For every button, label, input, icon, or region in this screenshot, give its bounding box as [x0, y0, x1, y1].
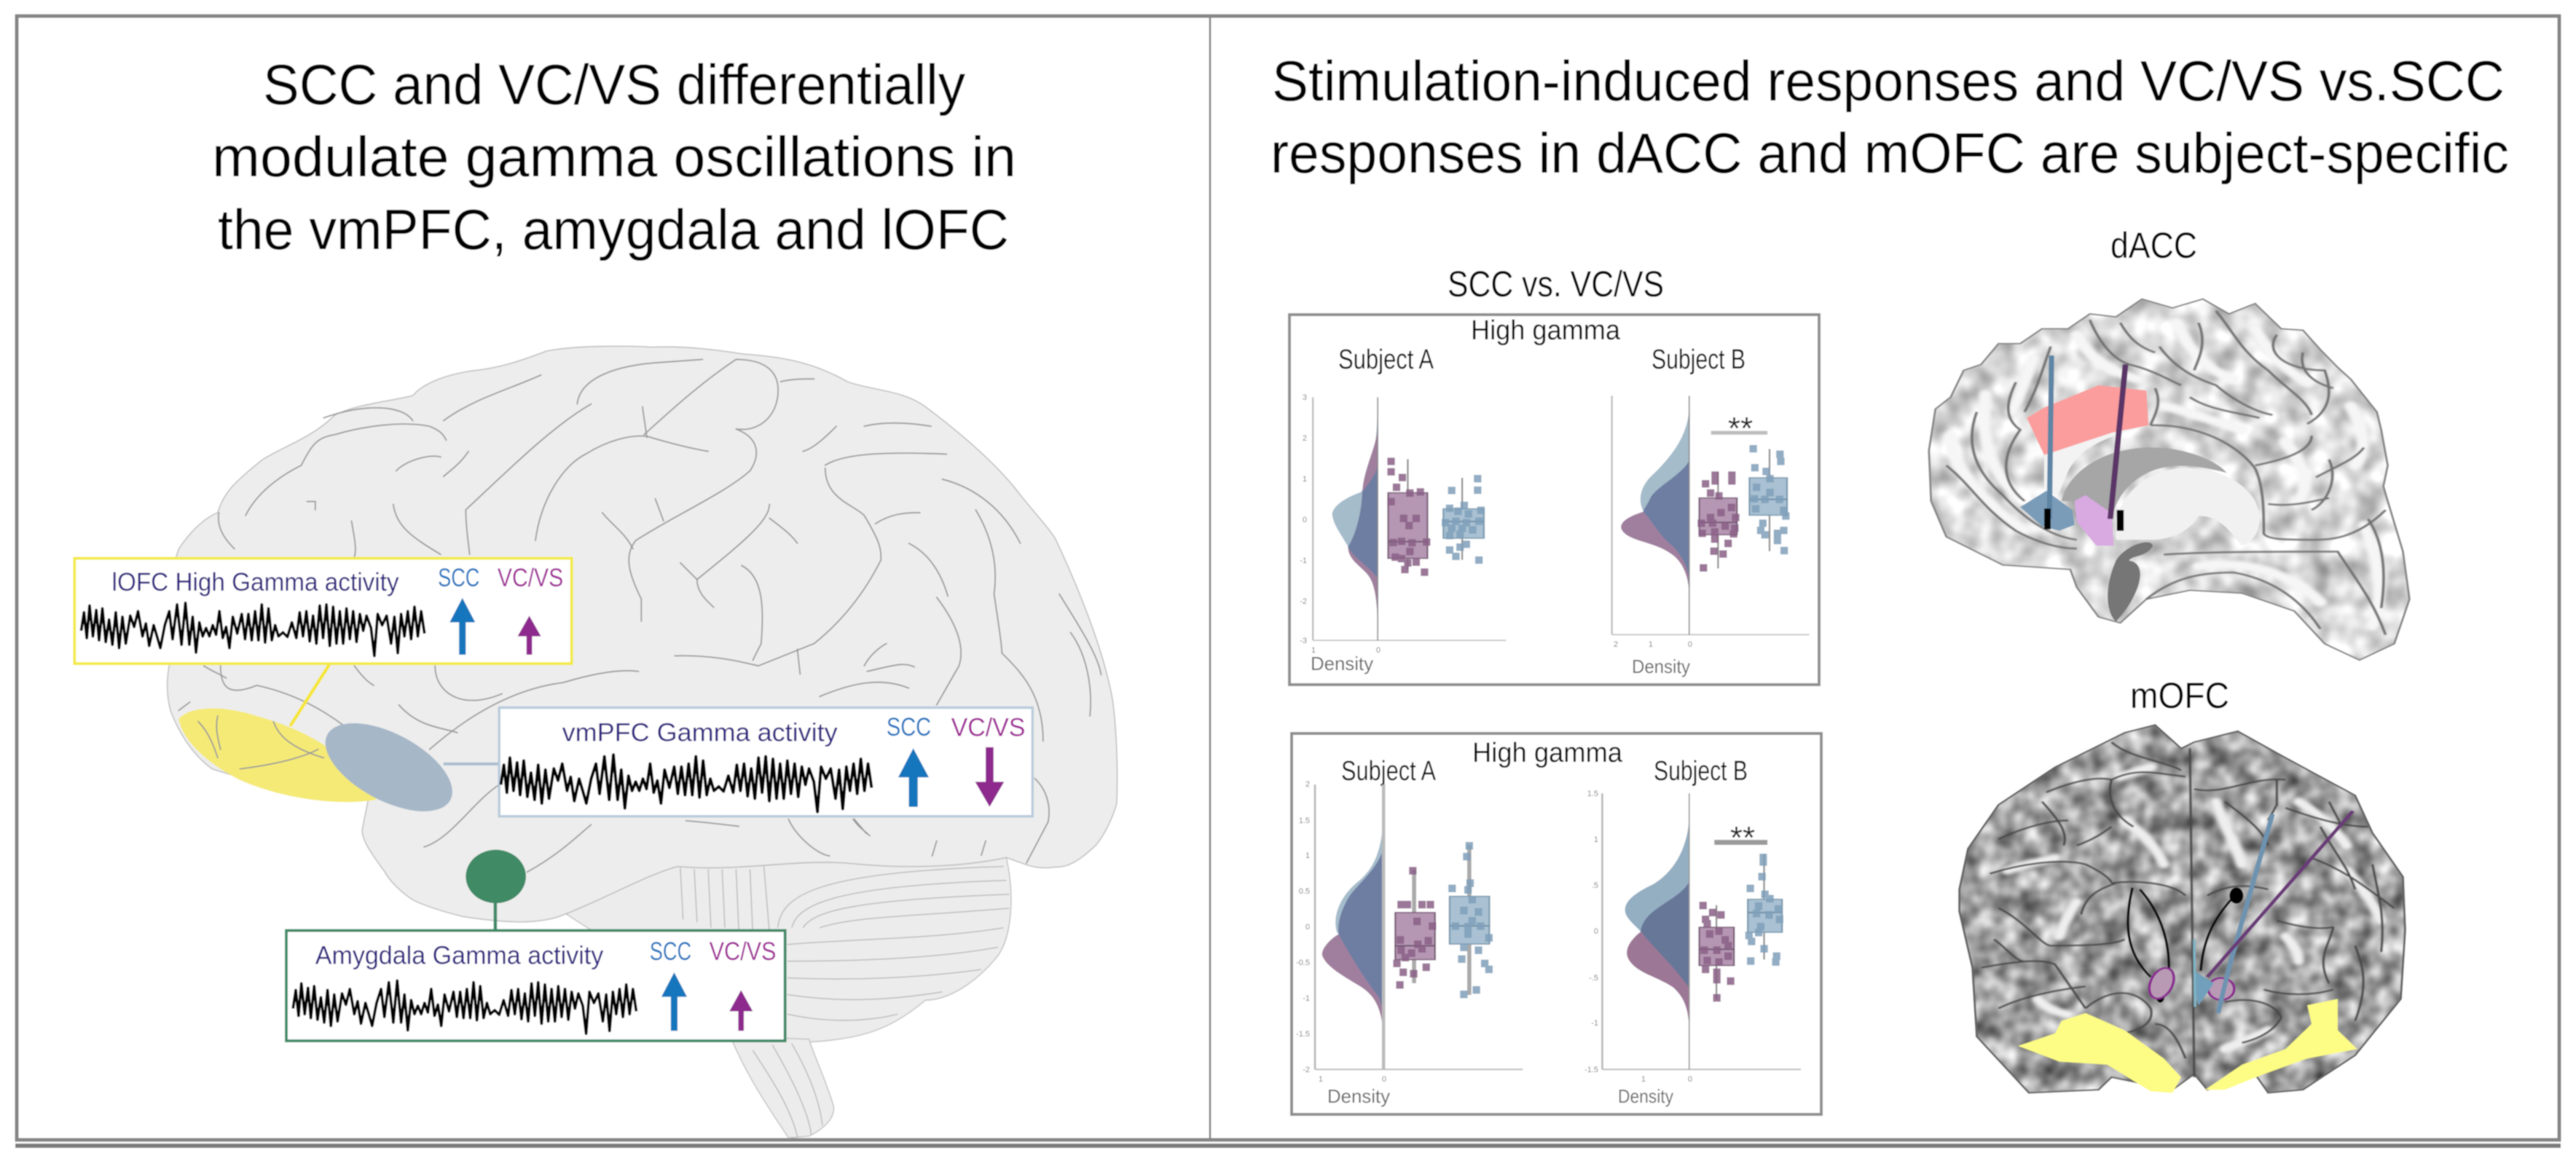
brain: mOFC frontal view — [1957, 723, 2407, 1094]
panel: raincloud plots top: Subject A — [1338, 345, 1434, 375]
corpus callosum — [2062, 447, 2227, 519]
callout: vmPFC Gamma activity: SCC — [887, 713, 931, 741]
panel: raincloud plots bottom: 1 — [1305, 851, 1310, 860]
vmPFC region — [312, 705, 466, 830]
panel: raincloud plots top: 0 — [1688, 640, 1692, 649]
panel: raincloud plots top: -3 — [1300, 637, 1307, 645]
panel: raincloud plots bottom: -1 — [1591, 1019, 1598, 1028]
panel: raincloud plots top: 2 — [1303, 434, 1307, 443]
panel: raincloud plots top: 1 — [1311, 646, 1316, 655]
panel: raincloud plots bottom: 0.5 — [1299, 887, 1310, 896]
chart: Subject B — [1602, 793, 1801, 1069]
SCC target — [2020, 491, 2075, 531]
callout: Amygdala Gamma activity: SCC — [650, 937, 691, 966]
VC/VS target — [2075, 495, 2113, 546]
panel: raincloud plots bottom: -1.5 — [1585, 1066, 1598, 1074]
panel: raincloud plots bottom: -1 — [1303, 994, 1310, 1003]
right panel title: responses in dACC and mOFC are subject-specific — [1271, 121, 2509, 185]
chart: Subject B — [1612, 395, 1810, 634]
panel: raincloud plots bottom: Subject B — [1654, 756, 1748, 787]
callout: vmPFC Gamma activity — [499, 708, 1032, 816]
panel: raincloud plots top: ** — [1728, 411, 1753, 446]
left panel title: SCC and VC/VS differentially — [263, 52, 965, 117]
chart: Subject A — [1313, 397, 1506, 640]
panel: raincloud plots top: 2 — [1614, 640, 1618, 649]
panel: raincloud plots bottom: 1.5 — [1299, 816, 1310, 825]
dACC region — [2027, 385, 2148, 455]
right panel title — [1271, 49, 2509, 185]
callout: Amygdala Gamma activity: VC/VS — [710, 937, 776, 966]
panel: raincloud plots bottom — [1292, 733, 1821, 1114]
panel: raincloud plots bottom: High gamma — [1472, 738, 1623, 768]
panel: raincloud plots bottom: 0 — [1382, 1075, 1386, 1084]
callout: vmPFC Gamma activity: vmPFC Gamma activity — [562, 718, 838, 747]
panel: raincloud plots top: 0 — [1376, 646, 1381, 655]
brainstem section — [2108, 542, 2153, 621]
panel: raincloud plots top: Density — [1311, 653, 1373, 674]
panel: raincloud plots top: -2 — [1300, 597, 1307, 606]
callout: Amygdala Gamma activity: Amygdala Gamma activity — [315, 941, 604, 969]
panel: raincloud plots bottom: -.5 — [1589, 974, 1598, 983]
cingulate white band — [2044, 425, 2148, 495]
chart: Subject A — [1315, 784, 1523, 1069]
panel: raincloud plots bottom: 0 — [1688, 1075, 1692, 1084]
panel: raincloud plots top: 1 — [1303, 475, 1307, 484]
panel: raincloud plots top: High gamma — [1471, 315, 1621, 346]
panel: raincloud plots top — [1289, 315, 1819, 685]
panel: raincloud plots bottom: Density — [1618, 1085, 1673, 1107]
heading: SCC vs. VC/VS: SCC vs. VC/VS — [1448, 264, 1664, 304]
panel: raincloud plots bottom: 1 — [1594, 835, 1598, 844]
thalamus — [2116, 468, 2259, 546]
gyri highlights — [1951, 323, 2379, 626]
gyri highlights — [2007, 767, 2381, 1049]
callout: Amygdala Gamma activity — [286, 931, 785, 1041]
panel: raincloud plots top: -1 — [1300, 556, 1307, 565]
panel: raincloud plots bottom: 1.5 — [1587, 790, 1598, 798]
lOFC region — [178, 709, 377, 802]
electrode: SCC — [2218, 814, 2272, 1013]
panel: raincloud plots bottom: 0 — [1305, 923, 1310, 932]
panel: lateral brain with callouts — [74, 346, 1118, 1138]
right panel title: Stimulation-induced responses and VC/VS vs.SCC — [1272, 49, 2505, 113]
panel: raincloud plots bottom: -0.5 — [1296, 959, 1310, 967]
electrode: VC/VS — [2110, 364, 2126, 531]
brain: dACC medial view — [1928, 297, 2411, 661]
callout: vmPFC Gamma activity: VC/VS — [951, 714, 1025, 742]
callout: lOFC High Gamma activity: lOFC High Gamma activity — [112, 568, 399, 597]
callout: lOFC High Gamma activity: VC/VS — [498, 564, 563, 592]
panel: raincloud plots top: Density — [1632, 656, 1690, 677]
lOFC region: left — [2018, 1013, 2181, 1093]
panel: raincloud plots top: Subject B — [1652, 345, 1746, 375]
heading: mOFC: mOFC — [2130, 675, 2229, 716]
panel: raincloud plots bottom: 2 — [1305, 780, 1310, 789]
panel: raincloud plots bottom: Density — [1327, 1085, 1390, 1107]
dark ventricles — [2128, 888, 2234, 983]
left panel title — [212, 52, 1016, 261]
panel: raincloud plots top: 1 — [1649, 640, 1653, 649]
panel: raincloud plots bottom: Subject A — [1341, 756, 1437, 787]
panel: raincloud plots bottom: 1 — [1641, 1075, 1646, 1084]
panel: raincloud plots bottom: -2 — [1303, 1066, 1310, 1074]
left panel title: modulate gamma oscillations in — [212, 125, 1016, 189]
panel: raincloud plots bottom: -1.5 — [1296, 1030, 1310, 1039]
connector: lOFC — [290, 665, 329, 726]
panel: raincloud plots bottom: 0 — [1594, 927, 1598, 936]
connector: amygdala — [493, 902, 498, 932]
SCC target — [2194, 971, 2214, 1005]
cerebellum folds — [680, 867, 1009, 1137]
panel: raincloud plots top: 3 — [1303, 393, 1307, 402]
lOFC region: right — [2205, 999, 2357, 1090]
left panel title: the vmPFC, amygdala and lOFC — [218, 197, 1009, 261]
brain illustration — [168, 346, 1118, 1138]
connector: vmPFC — [444, 762, 500, 766]
panel: raincloud plots bottom: ** — [1730, 820, 1755, 856]
VC/VS targets — [2145, 966, 2234, 1001]
callout: lOFC High Gamma activity: SCC — [438, 564, 479, 592]
panel: raincloud plots top: 0 — [1303, 516, 1307, 524]
amygdala region — [466, 850, 526, 903]
panel: raincloud plots bottom: .5 — [1592, 881, 1598, 890]
callout: lOFC High Gamma activity — [74, 559, 572, 664]
electrode: SCC — [2044, 355, 2051, 530]
electrode: VC/VS — [2207, 811, 2353, 977]
heading: dACC: dACC — [2110, 225, 2197, 266]
panel: raincloud plots bottom: 1 — [1319, 1075, 1323, 1084]
